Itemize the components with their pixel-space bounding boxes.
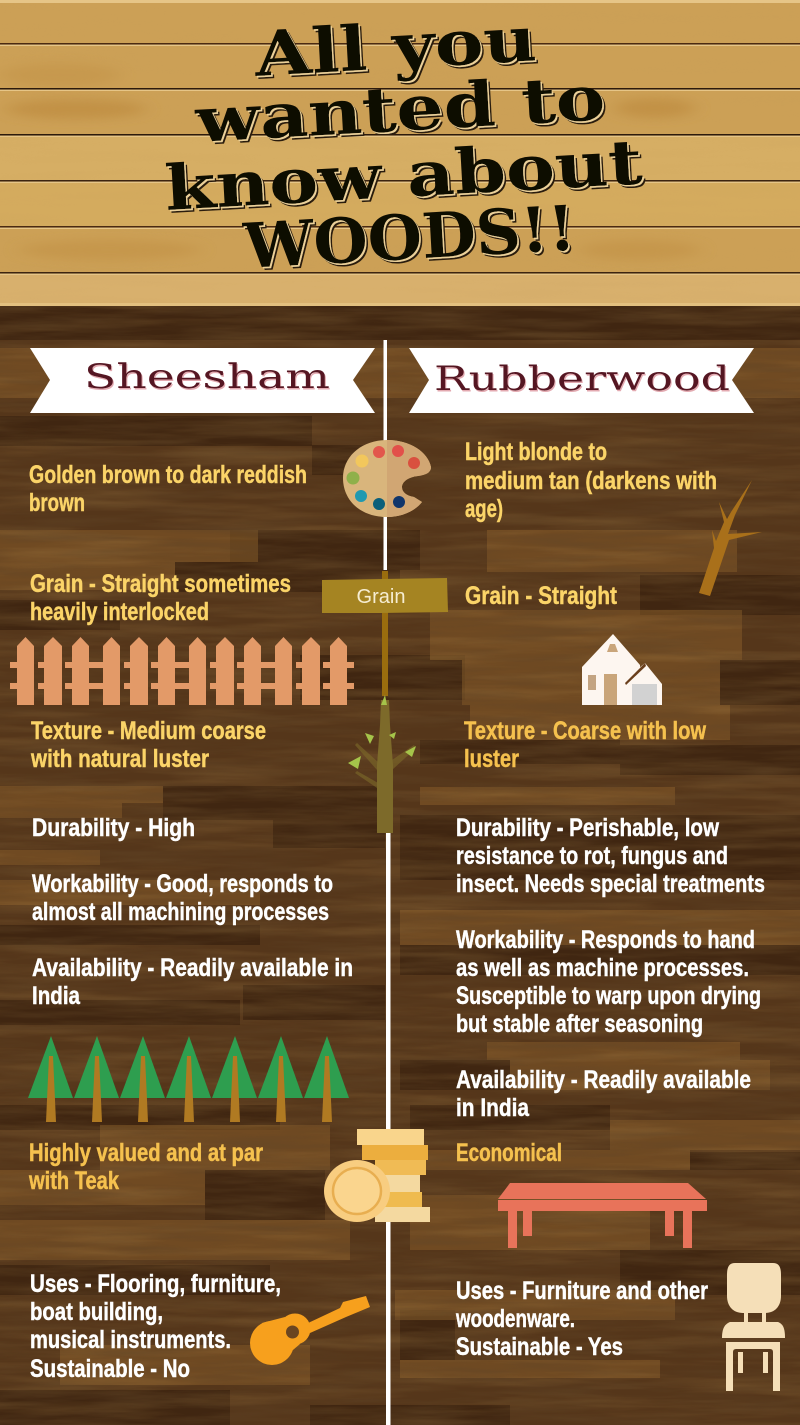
icon: house	[582, 634, 662, 705]
text block: Sheesham workability: almost all machining processes	[32, 898, 329, 926]
text block: Sheesham uses	[30, 1270, 281, 1383]
text block: Rubberwood uses: woodenware.	[455, 1305, 575, 1333]
text block: Rubberwood availability	[456, 1066, 751, 1122]
icon: row of pine trees	[28, 1036, 349, 1122]
banner: Sheesham: Sheesham	[84, 357, 330, 397]
title: WOODS!!	[241, 192, 577, 283]
text block: Sheesham grain: heavily interlocked	[30, 598, 209, 626]
text block: Sheesham uses: Uses - Flooring, furniture,	[30, 1270, 281, 1298]
text block: Rubberwood colour: Light blonde to	[465, 438, 607, 466]
text block: Rubberwood value: Economical	[456, 1139, 562, 1167]
text block: Sheesham texture	[30, 717, 266, 773]
text block: Sheesham durability: Durability - High	[32, 814, 195, 842]
banner: Rubberwood	[409, 348, 754, 413]
text block: Sheesham grain: Grain - Straight sometimes	[30, 570, 291, 598]
text block: Sheesham colour: brown	[29, 489, 85, 517]
title	[163, 2, 645, 283]
text block: Sheesham colour	[29, 461, 307, 517]
text block: Sheesham grain	[30, 570, 291, 626]
text block: Sheesham workability	[32, 870, 333, 926]
title: know about	[163, 125, 645, 225]
icon: grain signpost	[322, 571, 448, 696]
text block: Sheesham availability	[32, 954, 353, 1010]
panel: light plank header	[0, 0, 800, 306]
text block: Sheesham value: with Teak	[28, 1167, 119, 1195]
text block: Rubberwood durability: Durability - Perishable, low	[456, 814, 719, 842]
text block: Sheesham availability: India	[32, 982, 81, 1010]
text block: Rubberwood uses: Sustainable - Yes	[456, 1333, 623, 1361]
text block: Rubberwood texture: Texture - Coarse with low	[464, 717, 706, 745]
text block: Sheesham texture: Texture - Medium coarse	[31, 717, 266, 745]
text block: Rubberwood texture: luster	[464, 745, 519, 773]
text block: Sheesham texture: with natural luster	[30, 745, 209, 773]
banner: Rubberwood: Rubberwood	[434, 359, 730, 399]
icon: guitar	[250, 1296, 370, 1365]
text block: Sheesham availability: Availability - Readily available in	[32, 954, 353, 982]
text block: Rubberwood durability: resistance to rot, fungus and	[456, 842, 728, 870]
text block: Sheesham value	[28, 1139, 263, 1195]
text block: Rubberwood texture	[464, 717, 706, 773]
text block: Sheesham uses: musical instruments.	[30, 1326, 231, 1354]
text block: Sheesham uses: Sustainable - No	[30, 1355, 190, 1383]
text block: Rubberwood uses	[455, 1277, 708, 1361]
text block: Rubberwood colour: medium tan (darkens with	[465, 467, 717, 495]
icon: stacked logs	[324, 1129, 430, 1222]
icon: sapling trunk	[348, 695, 416, 833]
text block: Rubberwood durability	[456, 814, 765, 898]
icon: grain signpost: Grain	[357, 586, 405, 608]
text block: Sheesham colour: Golden brown to dark reddish	[29, 461, 307, 489]
banner: Sheesham	[30, 348, 375, 413]
panel: dark wood floor background	[0, 306, 800, 1425]
text block: Sheesham workability: Workability - Good, responds to	[32, 870, 333, 898]
icon: chair	[722, 1263, 785, 1391]
icon: bare tree branch	[699, 480, 762, 596]
text block: Rubberwood grain: Grain - Straight	[465, 582, 618, 610]
text block: Rubberwood uses: Uses - Furniture and other	[456, 1277, 708, 1305]
text block: Rubberwood workability	[456, 926, 761, 1038]
centre dividing line	[384, 340, 390, 1425]
icon: bench	[498, 1183, 707, 1248]
icon: picket fence	[10, 637, 354, 705]
text block: Sheesham value: Highly valued and at par	[29, 1139, 263, 1167]
text block: Rubberwood workability: but stable after seasoning	[456, 1010, 703, 1038]
icon: paint palette	[343, 440, 431, 517]
title: All you	[252, 2, 538, 91]
text block: Rubberwood availability: in India	[456, 1094, 530, 1122]
text block: Sheesham uses: boat building,	[30, 1298, 163, 1326]
text block: Rubberwood colour: age)	[465, 495, 503, 523]
text block: Rubberwood colour	[465, 438, 717, 523]
title: wanted to	[193, 61, 607, 157]
